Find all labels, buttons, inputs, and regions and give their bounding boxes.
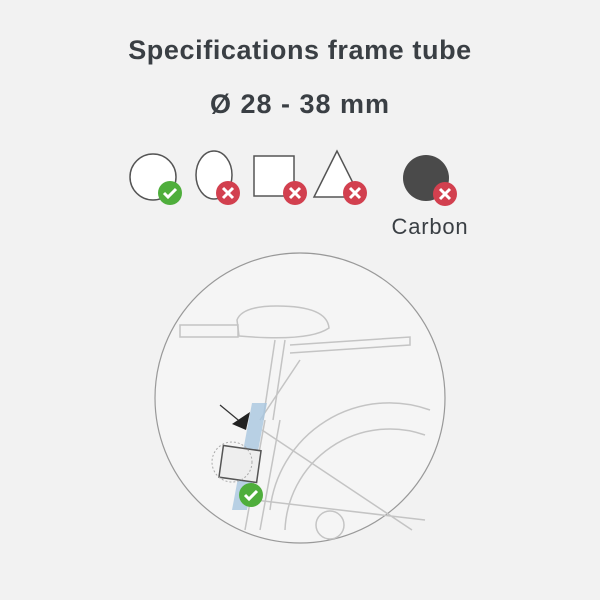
icon: triangle tube no (314, 151, 367, 205)
icon: round tube ok (130, 154, 182, 205)
arrow (220, 405, 250, 430)
blue seat tube highlight (232, 403, 267, 510)
check mark ok (239, 483, 263, 507)
mount device (212, 442, 261, 482)
icon: square tube no (254, 156, 307, 205)
title: Specifications frame tube (128, 35, 472, 65)
icon: carbon no (403, 155, 457, 206)
subtitle: diameter: Ø 28 - 38 mm (210, 89, 390, 119)
label: Carbon: Carbon (392, 214, 468, 239)
icon: oval tube no (196, 151, 240, 205)
bike illustration circle (155, 253, 445, 543)
